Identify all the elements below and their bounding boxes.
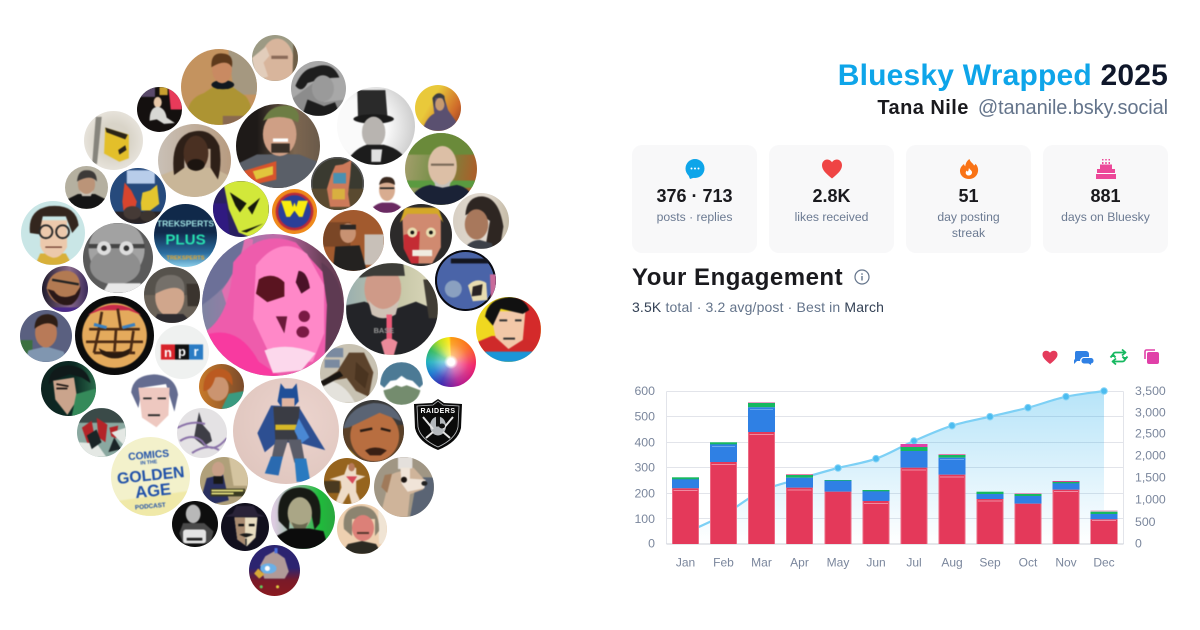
avatar: cartoon man with glasses	[21, 201, 85, 265]
avatar: man in cap with fork	[346, 263, 438, 355]
avatar: smiling man in purple shirt	[367, 173, 407, 213]
avatar: Comics in the Golden Age podcast logo: IN THE	[140, 459, 158, 467]
avatar: smiling man in cap and X-Men shirt	[236, 104, 320, 188]
chart legend icons	[1042, 348, 1159, 366]
avatar: man with hand on face	[252, 35, 298, 81]
left axis labels: 0	[648, 536, 655, 550]
avatar cloud	[20, 35, 541, 596]
section heading: Your Engagement	[632, 264, 843, 291]
avatar: man with camera in ornate room	[200, 457, 248, 505]
stat card: streak: streak	[952, 226, 985, 240]
month labels: Jul	[906, 556, 922, 570]
avatar: zombie red face art	[390, 204, 452, 266]
month labels	[676, 556, 1115, 570]
avatar: NPR logo: r	[194, 344, 199, 359]
avatar: man in black hat	[291, 61, 346, 116]
avatar: pink mask (largest)	[202, 234, 344, 376]
avatar: bearded man in purple light	[42, 266, 88, 312]
avatar: mountain logo	[380, 362, 423, 405]
month labels: May	[827, 556, 849, 570]
bar: May	[824, 480, 852, 544]
icon: replies	[1074, 351, 1094, 365]
bar: December	[1090, 510, 1118, 544]
stat card: days on Bluesky: 881	[1090, 186, 1121, 206]
avatar: red and teal splatter art	[77, 408, 126, 457]
month labels: Jan	[676, 556, 695, 570]
avatar: Treksperts Plus logo: TREKSPERTS	[166, 255, 205, 261]
avatar: yellow cake on plate	[84, 111, 143, 170]
month labels: Aug	[941, 556, 963, 570]
avatar: Raiders shield logo: RAIDERS	[420, 408, 456, 415]
avatar: man with dark hair on green screen	[271, 485, 335, 549]
avatar: man with dreadlocks	[158, 124, 231, 197]
right axis labels: 1,000	[1135, 492, 1166, 506]
month labels: Oct	[1019, 556, 1038, 570]
icon: speech bubble	[686, 159, 704, 179]
engagement summary: 3.5K total · 3.2 avg/post · Best in March	[632, 299, 884, 315]
avatar: Comics in the Golden Age podcast logo: AGE	[134, 479, 172, 502]
avatar: woman with long dark hair	[453, 193, 509, 249]
stat card: posts and replies: posts · replies	[657, 210, 732, 224]
right axis labels: 3,500	[1135, 384, 1166, 398]
avatar: starship captain	[181, 49, 257, 125]
icon: info	[854, 269, 870, 285]
icon: quotes	[1145, 350, 1159, 364]
avatar: man with wavy grey hair	[337, 504, 387, 554]
left axis labels: 400	[634, 436, 655, 450]
right axis labels	[1135, 384, 1166, 550]
line markers	[835, 388, 1107, 471]
avatar: Batman action figure	[233, 378, 339, 484]
left axis labels: 300	[634, 460, 655, 474]
left axis labels: 500	[634, 410, 655, 424]
avatar: black and white man with mug	[172, 501, 218, 547]
stacked bars	[672, 402, 1118, 544]
bar: November	[1052, 481, 1080, 544]
avatar: hooded figure painting	[415, 85, 461, 131]
month labels: Feb	[713, 556, 734, 570]
stat card: likes: 2.8K	[812, 186, 851, 206]
month labels: Apr	[790, 556, 809, 570]
stat card: streak	[906, 145, 1031, 253]
stat card: posts and replies	[632, 145, 757, 253]
right axis labels: 1,500	[1135, 470, 1166, 484]
stat card: likes	[769, 145, 894, 253]
avatar: colour wheel	[426, 337, 476, 387]
avatar: black creature on paper	[177, 408, 227, 458]
avatar: Comics in the Golden Age podcast logo: GOLDEN	[116, 464, 185, 488]
month labels: Nov	[1055, 556, 1077, 570]
avatar: blue machine with black ring	[435, 250, 496, 311]
avatar: Treksperts Plus logo	[154, 204, 217, 267]
bar: August	[938, 454, 966, 544]
stat card: streak: 51	[958, 186, 979, 206]
stat card: days on Bluesky	[1043, 145, 1168, 253]
avatar: NPR logo: p	[178, 344, 186, 359]
stat card: streak: day posting	[937, 210, 1000, 224]
cumulative area	[686, 391, 1104, 544]
avatar: NPR logo: n	[164, 345, 172, 360]
avatar: W shield logo	[272, 189, 317, 234]
bar: March	[748, 402, 775, 544]
avatar: NPR logo	[155, 325, 209, 379]
bar: September	[976, 492, 1004, 544]
stat card: likes: likes received	[795, 210, 868, 224]
avatar: man in top hat	[337, 87, 415, 165]
avatar: action figure in chair	[137, 87, 182, 132]
avatar: green comic face	[213, 181, 269, 237]
avatar: Comics in the Golden Age podcast logo	[111, 437, 190, 516]
bar: January	[672, 477, 699, 544]
avatar: grey puppet with glasses	[83, 223, 153, 293]
stat card: posts and replies: 376 · 713	[656, 186, 733, 206]
right axis labels: 500	[1135, 515, 1156, 529]
right axis labels: 3,000	[1135, 406, 1166, 420]
icon: flame	[960, 159, 978, 179]
bar: June	[862, 490, 890, 544]
avatar: tan and white dog	[374, 457, 434, 517]
month labels: Sep	[979, 556, 1001, 570]
bar: April	[786, 474, 813, 544]
avatar: man in bookshop	[323, 210, 384, 271]
right axis labels: 2,000	[1135, 448, 1166, 462]
avatar: Superman comic	[476, 297, 541, 362]
left axis labels: 100	[634, 512, 655, 526]
avatar: Elvis in white jumpsuit	[324, 458, 370, 504]
avatar: Comics in the Golden Age podcast logo: COMICS	[128, 449, 170, 463]
avatar: shaggy brown dog on sofa	[320, 344, 378, 403]
icon: likes	[1042, 351, 1058, 364]
bar: July	[900, 444, 928, 544]
user name and handle: Tana Nile @tananile.bsky.social	[877, 97, 1168, 119]
avatar: person in patchwork costume	[311, 157, 364, 210]
stat card: days on Bluesky: days on Bluesky	[1061, 210, 1150, 224]
left axis labels	[634, 384, 655, 550]
avatar: dark-haired man in green shadow	[41, 361, 96, 416]
avatar: masked figure with hat	[221, 503, 269, 551]
title: Bluesky Wrapped 2025	[838, 59, 1168, 92]
avatar: man in black sweater	[65, 166, 108, 209]
avatar: Raiders shield logo	[414, 399, 462, 450]
avatar: woman with red hair	[199, 364, 244, 409]
avatar: weathered man in cap	[343, 400, 404, 462]
avatar: older man with glasses outdoors	[405, 133, 477, 205]
avatar: Treksperts Plus logo: PLUS	[165, 231, 206, 248]
avatar: doctor in blue tunic	[20, 310, 72, 362]
icon: reposts	[1110, 350, 1128, 364]
avatar: Comics in the Golden Age podcast logo: PODCAST	[135, 502, 166, 511]
avatar: comic man with grey hair	[124, 372, 184, 432]
right axis labels: 2,500	[1135, 426, 1166, 440]
left axis labels: 200	[634, 486, 655, 500]
avatar: man with short grey hair	[144, 267, 200, 323]
left axis labels: 600	[634, 384, 655, 398]
avatar: red and blue robot	[249, 545, 300, 596]
avatar: Treksperts Plus logo: TREKSPERTS	[157, 219, 214, 229]
icon: birthday cake	[1096, 159, 1116, 179]
avatar: comic superheroes	[110, 168, 166, 224]
icon: heart	[822, 160, 842, 178]
bar: October	[1014, 493, 1042, 544]
bar: February	[710, 442, 737, 544]
month labels: Mar	[751, 556, 772, 570]
month labels: Dec	[1093, 556, 1115, 570]
avatar: Thing comic face	[75, 296, 154, 375]
cumulative line	[686, 391, 1104, 533]
avatar: man in cap with fork: BASE	[374, 326, 394, 335]
month labels: Jun	[866, 556, 886, 570]
right axis labels: 0	[1135, 536, 1142, 550]
